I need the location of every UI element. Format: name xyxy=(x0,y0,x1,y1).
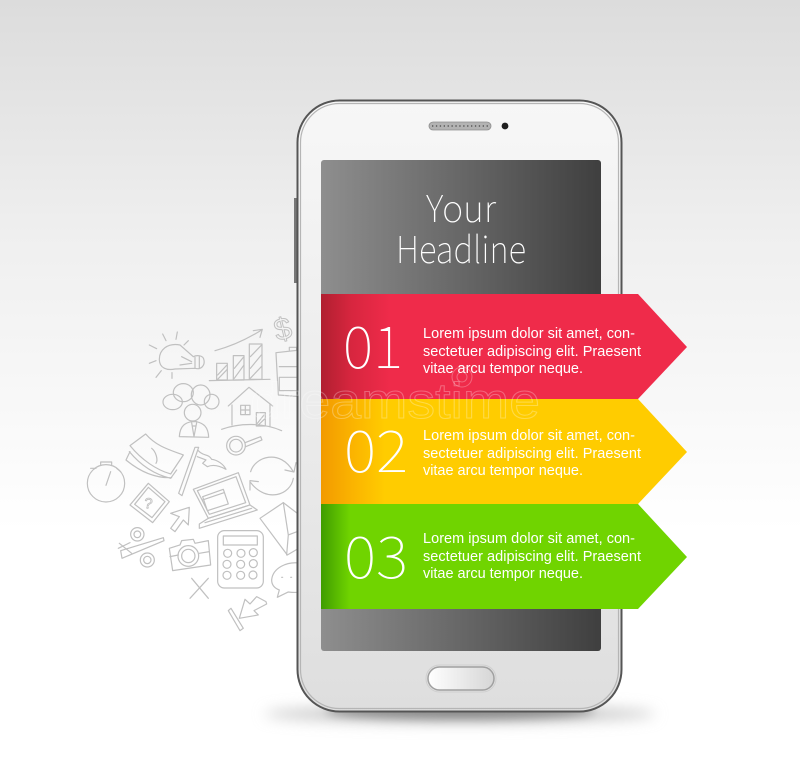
number 02: 02 xyxy=(344,405,408,489)
icon: rising bar chart xyxy=(209,329,270,381)
icon: stack of banknotes xyxy=(126,434,183,478)
ribbon 2: yellow xyxy=(321,399,687,504)
headline line 2: Headline xyxy=(396,220,526,274)
icon: magnifying glass xyxy=(227,436,262,455)
headline xyxy=(396,179,526,274)
icon: chat bubble xyxy=(272,563,302,597)
watermark: dreamstime xyxy=(250,373,540,429)
text block 2: sectetuer adipiscing elit. Praesent xyxy=(423,446,641,462)
text block 2 xyxy=(423,428,641,479)
front camera xyxy=(502,123,508,129)
icon: house xyxy=(222,387,282,431)
phone body xyxy=(298,100,622,712)
icon: question mark: ? xyxy=(143,496,153,513)
icon: document xyxy=(276,347,300,397)
icon: envelope xyxy=(260,503,302,555)
text block 1 xyxy=(423,326,641,377)
icon: thinking person xyxy=(163,384,219,437)
text block 2: Lorem ipsum dolor sit amet, con- xyxy=(423,428,635,444)
phone shadow xyxy=(265,703,655,723)
side button xyxy=(294,198,298,283)
icon: stopwatch xyxy=(87,462,125,502)
ribbon 1: red xyxy=(321,294,687,399)
icon: refresh arrows xyxy=(250,457,296,495)
home button xyxy=(426,665,496,692)
headline line 1: Your xyxy=(426,179,496,233)
number 01: 01 xyxy=(343,301,403,385)
phone screen xyxy=(321,160,601,651)
icon: down-left arrow xyxy=(228,597,267,631)
icon: dollar sign: $ xyxy=(270,311,295,348)
icon: laptop xyxy=(193,473,257,528)
text block 1: sectetuer adipiscing elit. Praesent xyxy=(423,344,641,360)
number 03: 03 xyxy=(344,511,408,595)
icon cluster: hand-drawn business sketches xyxy=(87,311,302,631)
icon: percent sign xyxy=(118,528,164,567)
text block 2: vitae arcu tempor neque. xyxy=(423,463,583,479)
icon: calculator xyxy=(218,531,263,588)
icon: light bulb xyxy=(149,332,204,378)
icon: camera xyxy=(169,539,211,571)
icon: up arrow xyxy=(171,507,189,532)
icon: question box xyxy=(130,483,169,523)
text block 3: Lorem ipsum dolor sit amet, con- xyxy=(423,531,635,547)
speaker xyxy=(429,122,491,130)
text block 3: sectetuer adipiscing elit. Praesent xyxy=(423,549,641,565)
icon: cross xyxy=(190,578,208,598)
icon: flag xyxy=(179,447,226,496)
text block 1: Lorem ipsum dolor sit amet, con- xyxy=(423,326,635,342)
ribbon 3: green xyxy=(321,504,687,609)
text block 3 xyxy=(423,531,641,582)
text block 3: vitae arcu tempor neque. xyxy=(423,566,583,582)
text block 1: vitae arcu tempor neque. xyxy=(423,361,583,377)
